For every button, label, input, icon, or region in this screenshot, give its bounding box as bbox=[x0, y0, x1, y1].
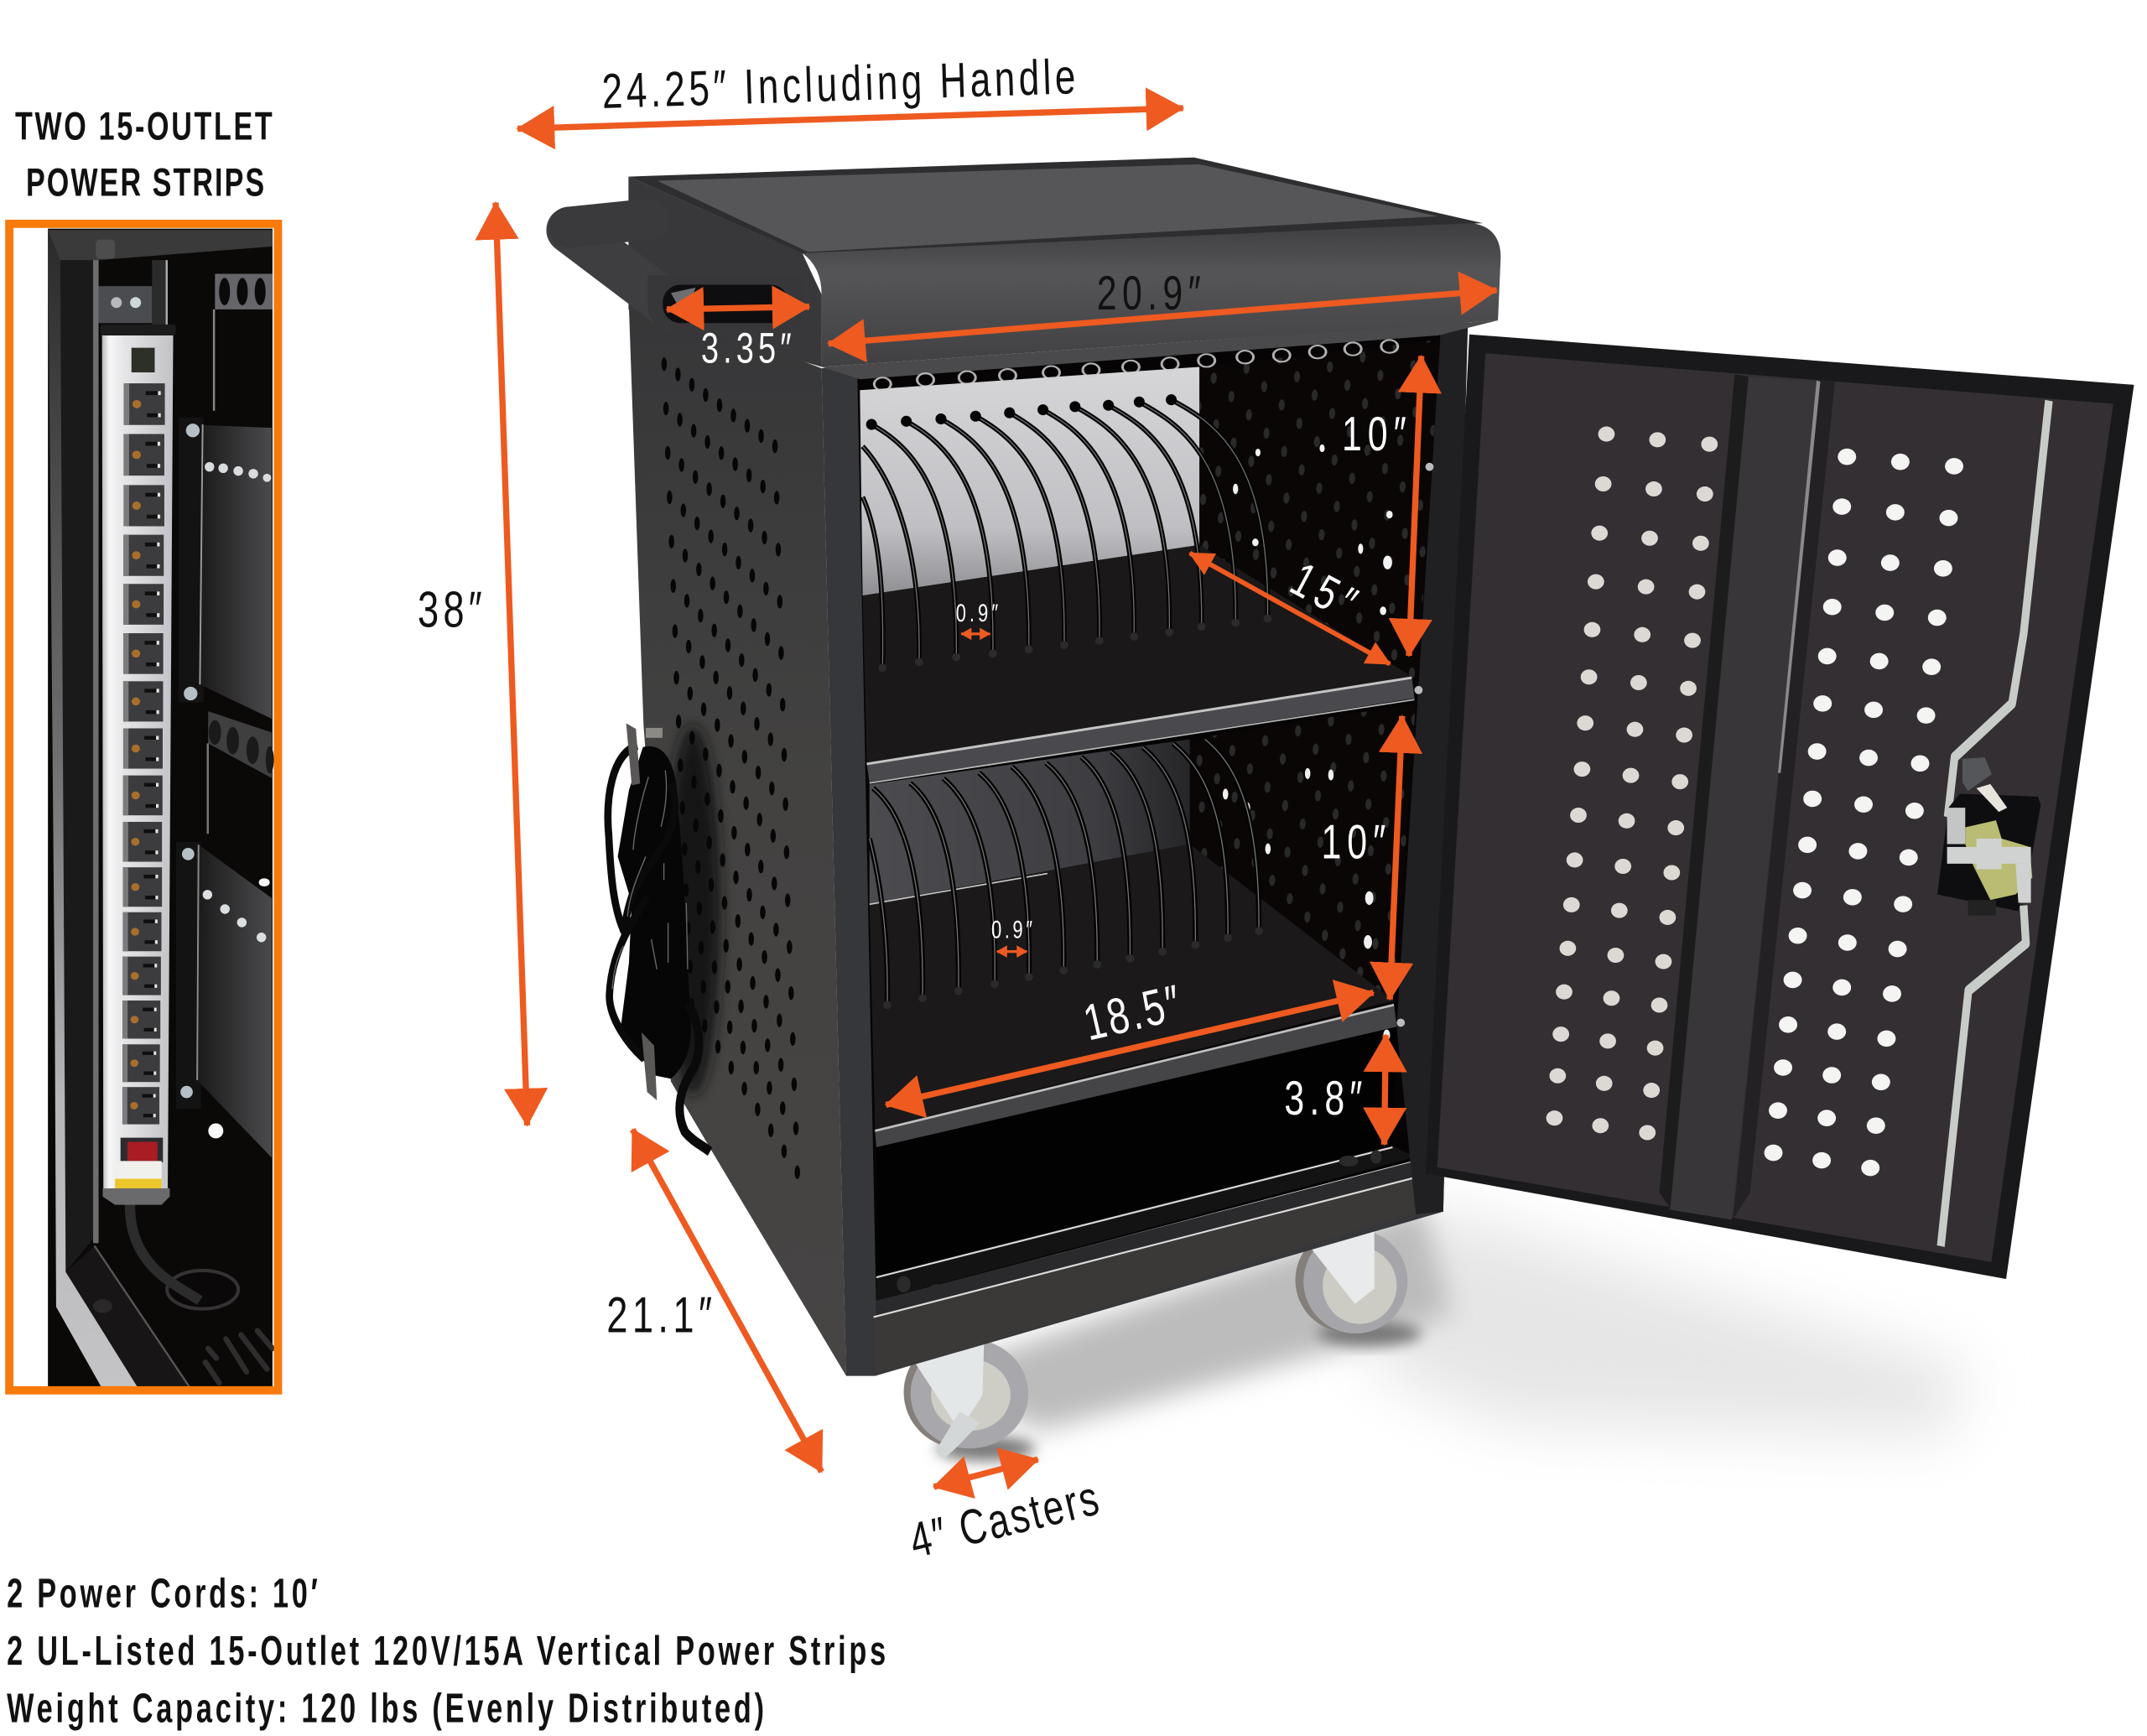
side perforation rows bbox=[664, 364, 798, 1172]
inset upper bracket bbox=[99, 260, 168, 326]
bottom compartment and rail bbox=[876, 1027, 1416, 1302]
cart bottom face bbox=[874, 1161, 1443, 1376]
inset top bar bbox=[48, 230, 273, 260]
dimension: 38 height bbox=[418, 203, 528, 1125]
inset door post bbox=[60, 252, 93, 1272]
door frame bbox=[1426, 335, 2134, 1279]
specification text: 2 UL-Listed 15-Outlet 120V/15A Vertical Power Strips bbox=[7, 1628, 886, 1674]
door inner panel bbox=[1437, 353, 2113, 1262]
dimension: 21.1 depth bbox=[606, 1130, 822, 1472]
specification text: Weight Capacity: 120 lbs (Evenly Distributed) bbox=[7, 1686, 764, 1731]
door holes left bbox=[1547, 427, 1718, 1141]
interior opening bbox=[857, 329, 1441, 1314]
dimension: 15 depth: 15″ bbox=[1282, 552, 1365, 630]
dimension: 3.35 handle bbox=[667, 307, 809, 372]
power cords coiled on side bbox=[608, 723, 710, 1151]
caster: front with brake bbox=[904, 1336, 1028, 1459]
dimension: 4 inch casters: 4″ Casters bbox=[904, 1471, 1104, 1569]
under lip rail bbox=[822, 320, 1498, 379]
cart floor shadows bbox=[931, 1205, 1972, 1461]
upper compartment bbox=[860, 340, 1441, 783]
lower shelf edge bbox=[875, 1004, 1396, 1147]
lower perforated side wall bbox=[1190, 704, 1416, 1006]
charging cable loops bbox=[874, 340, 1398, 391]
inset lower bracket bbox=[176, 842, 272, 1157]
dimension: 10 lower bay bbox=[1322, 716, 1402, 1000]
heading: two 15-outlet power strips bbox=[15, 104, 273, 205]
dimension: 38 height: 38″ bbox=[418, 583, 482, 638]
cart top with mat bbox=[628, 158, 1500, 391]
dimension: 0.9 lower slot: 0.9″ bbox=[991, 915, 1032, 943]
door holes right bbox=[1765, 449, 1963, 1176]
dimension: 10 upper bay: 10″ bbox=[1342, 407, 1406, 461]
heading: two 15-outlet power strips: POWER STRIPS bbox=[26, 160, 264, 205]
dimension: 18.5 width bbox=[886, 975, 1374, 1104]
door rib bbox=[1660, 374, 1835, 1219]
dimension: 20.9 width: 20.9″ bbox=[1097, 266, 1201, 320]
panel: power strip inset bbox=[9, 224, 278, 1390]
dimension: 20.9 width bbox=[829, 266, 1496, 344]
cord highlights bbox=[612, 771, 688, 989]
heading: two 15-outlet power strips: TWO 15-OUTLET bbox=[15, 104, 273, 148]
dimension: 3.8 bottom bbox=[1284, 1035, 1385, 1145]
inset middle slot plate bbox=[207, 711, 274, 834]
dimension: 21.1 depth: 21.1″ bbox=[606, 1287, 712, 1344]
upper shelf floor bbox=[863, 545, 1411, 762]
cord loops bbox=[608, 746, 710, 1151]
specification text: 2 Power Cords: 10′ bbox=[7, 1571, 318, 1616]
caster: rear right bbox=[1295, 1227, 1407, 1333]
inset floor bbox=[65, 1246, 273, 1388]
lower back wall bbox=[870, 740, 1190, 904]
right post bbox=[1383, 326, 1468, 1214]
power strip body with 16 outlets bbox=[101, 325, 176, 1205]
lower compartment bbox=[870, 704, 1416, 1147]
upper divider rods bbox=[863, 394, 1271, 672]
door bbox=[1426, 335, 2134, 1279]
inset top slot plate bbox=[213, 273, 273, 411]
upper shelf edge bbox=[866, 676, 1415, 783]
upper perforated side wall bbox=[1199, 340, 1441, 686]
top block side bbox=[628, 177, 822, 367]
top mat bbox=[658, 164, 1437, 252]
top rim bbox=[628, 158, 1483, 255]
inset outer door edge bbox=[48, 230, 138, 1388]
inset interior background bbox=[48, 229, 273, 1388]
dimension: 15 depth bbox=[1190, 552, 1390, 664]
cart front frame bbox=[822, 322, 1465, 1376]
dimension: 18.5 width: 18.5″ bbox=[1079, 975, 1186, 1052]
dimension: 10 upper bay bbox=[1342, 356, 1422, 656]
door lock and key bbox=[1937, 757, 2040, 916]
lower divider rods bbox=[870, 740, 1263, 1009]
upper back wall bbox=[860, 367, 1199, 595]
dimension: 24.25 including handle: 24.25″ Including Handle bbox=[601, 49, 1076, 120]
cart side panel with perforations bbox=[628, 294, 846, 1376]
inset grommet and strip cord bbox=[130, 1202, 238, 1309]
front lip bbox=[803, 223, 1500, 367]
lower shelf floor bbox=[870, 845, 1394, 1130]
inset bracket with bolts bbox=[179, 418, 272, 719]
handle bbox=[569, 219, 803, 330]
dimension: 3.35 handle: 3.35″ bbox=[701, 325, 792, 372]
specification text bbox=[7, 1571, 886, 1731]
cord bundle core bbox=[618, 746, 691, 1079]
dimension: 0.9 upper slot: 0.9″ bbox=[956, 599, 998, 627]
door locking rod bbox=[1941, 401, 2049, 1246]
dimension: 24.25 including handle bbox=[517, 49, 1183, 128]
inset orange frame bbox=[9, 224, 278, 1390]
cord straps and plug bbox=[626, 723, 640, 785]
dimension: 3.8 bottom: 3.8″ bbox=[1284, 1071, 1362, 1125]
dimension: 10 lower bay: 10″ bbox=[1322, 815, 1385, 869]
